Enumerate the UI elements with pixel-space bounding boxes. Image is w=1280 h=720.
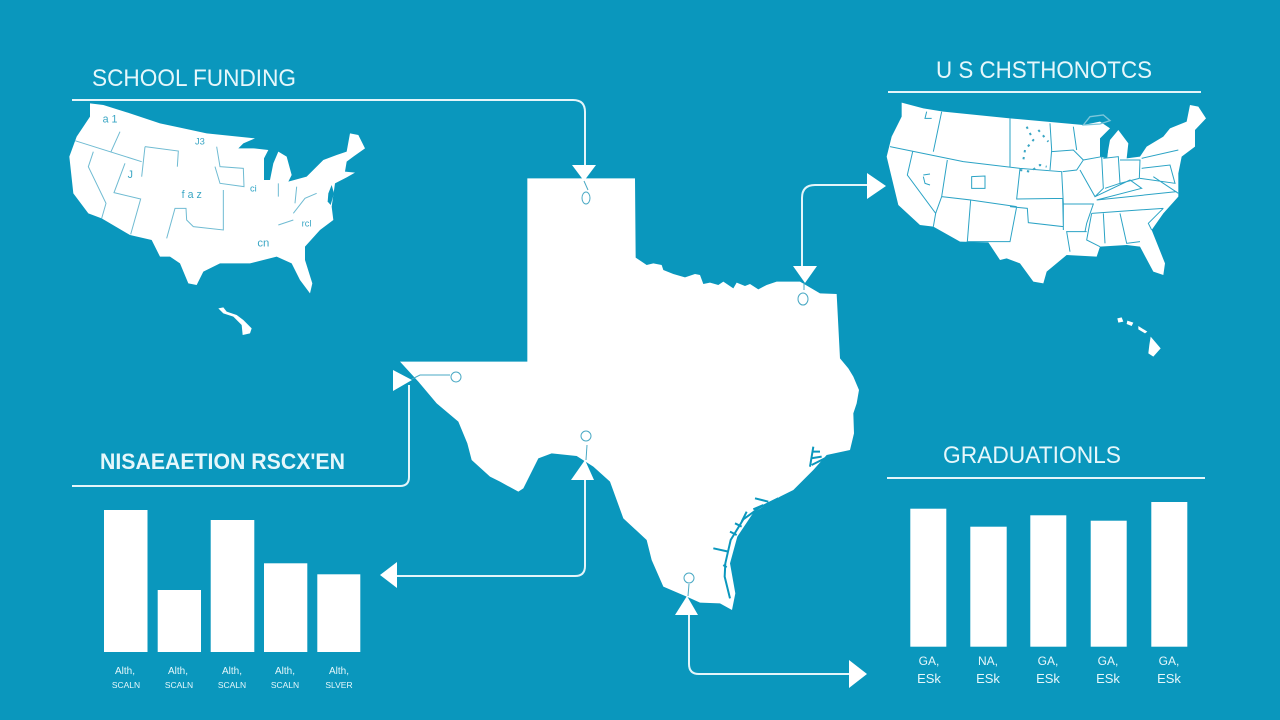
map: US school funding: ci xyxy=(250,183,257,193)
map: US school funding: cn xyxy=(257,238,269,250)
connector: Texas to bottom-left chart xyxy=(380,431,594,588)
coastline detail xyxy=(713,447,825,598)
bar labels: graduations: GA, xyxy=(919,654,939,668)
bar labels: graduations: GA, xyxy=(1098,654,1118,668)
divider line: US comparison xyxy=(888,91,1201,93)
connector: Texas to US comparison xyxy=(793,173,886,305)
bar labels: graduations: ESk xyxy=(976,671,1000,686)
heading: US comparison: U S CHSTHONOTCS xyxy=(936,57,1152,84)
bar labels: bottom-left chart: Alth, xyxy=(329,666,349,677)
map: US school funding: J xyxy=(128,169,133,181)
heading: school funding: SCHOOL FUNDING xyxy=(92,65,296,92)
bar labels: bottom-left chart: SCALN xyxy=(271,680,299,690)
bar labels: bottom-left chart: SCALN xyxy=(165,680,193,690)
bar labels: graduations: GA, xyxy=(1038,654,1058,668)
bar labels: graduations: ESk xyxy=(1036,671,1060,686)
bar labels: graduations: ESk xyxy=(917,671,941,686)
map: US school funding: rcl xyxy=(302,219,312,229)
bar labels: bottom-left chart: SCALN xyxy=(112,680,140,690)
bar labels: graduations: NA, xyxy=(978,654,998,668)
bar labels: bottom-left chart: Alth, xyxy=(168,666,188,677)
heading: graduations: GRADUATIONLS xyxy=(943,442,1121,469)
connector: bottom-left heading to Texas xyxy=(72,370,461,486)
panel: school funding xyxy=(69,65,365,335)
bars: graduations xyxy=(910,502,1187,647)
bar labels: graduations: ESk xyxy=(1096,671,1120,686)
connector: Texas to graduations xyxy=(675,573,867,688)
map: US school funding xyxy=(69,103,365,335)
bar labels: bottom-left chart: Alth, xyxy=(115,666,135,677)
bar labels: bottom-left chart: Alth, xyxy=(275,666,295,677)
bar labels: graduations: GA, xyxy=(1159,654,1179,668)
map: Texas xyxy=(400,178,859,610)
map: US comparison xyxy=(887,103,1206,357)
bars: bottom-left chart xyxy=(104,510,360,652)
panel: US comparison xyxy=(887,57,1206,357)
map: US school funding: a 1 xyxy=(103,114,118,126)
bar labels: bottom-left chart xyxy=(112,666,353,690)
map: US school funding: J3 xyxy=(195,136,205,146)
panel: graduations xyxy=(887,442,1205,686)
connector: school funding to Texas xyxy=(72,100,596,204)
divider line: graduations xyxy=(887,477,1205,479)
bar labels: graduations: ESk xyxy=(1157,671,1181,686)
bar labels: graduations xyxy=(917,654,1181,686)
bar labels: bottom-left chart: SCALN xyxy=(218,680,246,690)
map: US school funding: f a z xyxy=(182,189,202,201)
panel: bottom-left bar chart xyxy=(100,449,360,690)
heading: bottom-left chart: NISAEAETION RSCX'EN xyxy=(100,449,345,474)
bar labels: bottom-left chart: SLVER xyxy=(325,680,353,690)
bar labels: bottom-left chart: Alth, xyxy=(222,666,242,677)
